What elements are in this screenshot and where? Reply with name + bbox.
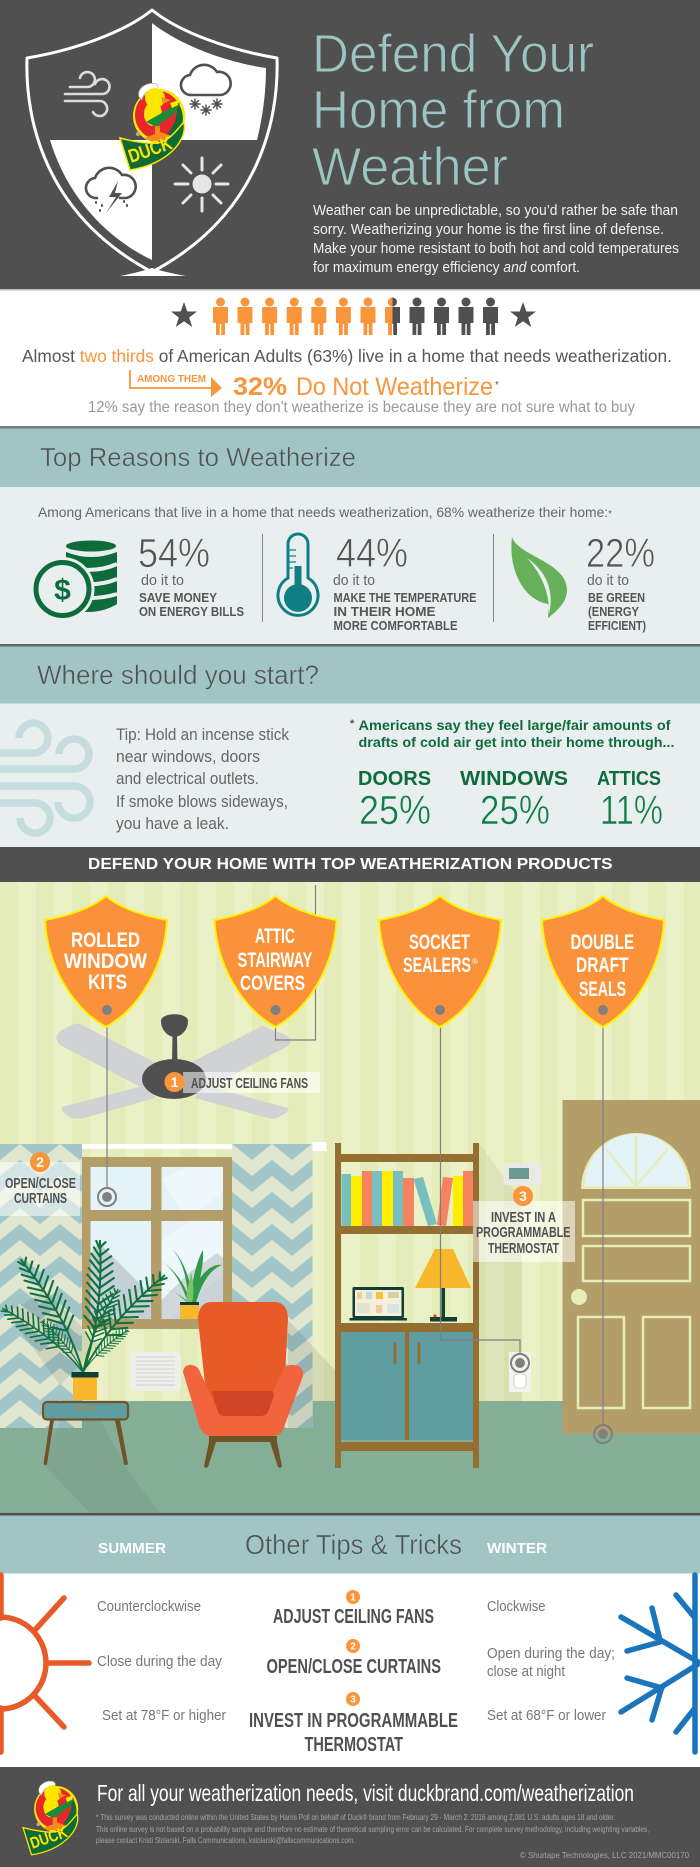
label: open/close curtains: 2 xyxy=(36,1154,44,1170)
stat: 54%: do it to xyxy=(141,573,184,589)
tip text: and electrical outlets. xyxy=(116,769,259,788)
winter tips: close at night xyxy=(487,1663,566,1680)
laptop xyxy=(350,1287,407,1320)
stat: doors: DOORS xyxy=(358,768,431,790)
label: programmable thermostat xyxy=(473,1186,575,1262)
title: Weather xyxy=(312,137,508,197)
ceiling fan xyxy=(56,1014,291,1119)
tip text: If smoke blows sideways, xyxy=(116,792,288,811)
icon: wind xyxy=(65,72,110,116)
stat: 54%: 54% xyxy=(138,530,210,576)
label: summer: SUMMER xyxy=(98,1540,166,1557)
wall shadows xyxy=(288,1320,335,1428)
tip 3 xyxy=(249,1692,458,1756)
icon: leaf xyxy=(511,537,567,618)
drafts statement: drafts of cold air get into their home through... xyxy=(358,735,674,750)
badge: attic stairway covers: COVERS xyxy=(240,972,305,995)
logo: Duck brand: DUCK xyxy=(126,133,175,168)
plant and side table xyxy=(0,1239,171,1513)
badge: socket sealers: SEALERS xyxy=(403,954,471,977)
stat: 22% xyxy=(586,530,655,633)
summer tips: Set at 78°F or higher xyxy=(102,1707,226,1724)
curtain rod xyxy=(82,1142,326,1151)
icon: wind large xyxy=(0,723,90,833)
badge: attic stairway covers: STAIRWAY xyxy=(238,949,312,972)
tip 1 xyxy=(273,1590,434,1628)
icon: coins: $ xyxy=(54,574,71,607)
summer tips: Close during the day xyxy=(97,1653,222,1670)
winter tips: Open during the day; xyxy=(487,1645,615,1662)
curtain right xyxy=(232,1144,312,1428)
label: programmable thermostat: INVEST IN A xyxy=(491,1209,556,1226)
note: 12%: 12% say the reason they don't weatherize is because they are not sure what to buy xyxy=(88,399,635,416)
stat: attics: ATTICS xyxy=(597,768,661,790)
stat: windows: 25% xyxy=(480,787,550,833)
icon: thermometer xyxy=(278,534,318,615)
label: open/close curtains xyxy=(0,1152,80,1216)
panel: statistics xyxy=(0,289,700,428)
callout: 32% do not weatherize: Do Not Weatherize xyxy=(296,373,493,401)
title: Home from xyxy=(312,80,565,140)
title xyxy=(312,24,594,197)
drafts statement: * xyxy=(350,718,355,730)
stat: 54%: SAVE MONEY xyxy=(139,591,218,605)
panel: top reasons xyxy=(0,428,700,646)
intro text: sorry. Weatherizing your home is the first line of defense. xyxy=(313,221,664,238)
callout: 32% do not weatherize: 32% xyxy=(233,373,287,401)
tip text: near windows, doors xyxy=(116,747,260,766)
footnote: please contact Kristi Stolarski, Falls Communications, kstolarski@fallscommunications.com. xyxy=(96,1835,355,1845)
outlet xyxy=(509,1352,531,1392)
stat: attics xyxy=(597,768,663,833)
badge: attic stairway covers: ATTIC xyxy=(255,925,295,948)
icon: star left xyxy=(171,302,197,327)
stat: 22%: EFFICIENT) xyxy=(588,619,646,633)
tip text: you have a leak. xyxy=(116,814,229,833)
badge: double draft seals: SEALS xyxy=(579,978,626,1001)
books xyxy=(342,1171,473,1226)
tip 2: 2 xyxy=(350,1642,356,1652)
label: programmable thermostat: PROGRAMMABLE xyxy=(476,1224,570,1241)
stat: doors: 25% xyxy=(359,787,431,833)
subheading: Among Americans that live in a home that needs weatherization, 68% weatherize their home:* xyxy=(38,504,612,520)
arrow: among them xyxy=(130,370,222,397)
stat: windows: WINDOWS xyxy=(460,768,568,790)
plant shadow xyxy=(7,1290,100,1385)
heading: Other Tips & Tricks xyxy=(245,1529,462,1560)
stat: 54% xyxy=(138,530,244,619)
label: adjust ceiling fans: 1 xyxy=(171,1074,179,1090)
badge: attic stairway covers xyxy=(214,896,336,1027)
tip 1: ADJUST CEILING FANS xyxy=(273,1606,434,1628)
label: programmable thermostat: THERMOSTAT xyxy=(488,1240,559,1257)
stat: 22%: (ENERGY xyxy=(588,605,640,619)
badge: double draft seals: DRAFT xyxy=(576,954,629,977)
badge: rolled window kits: WINDOW xyxy=(64,950,147,973)
label: programmable thermostat: 3 xyxy=(519,1188,527,1204)
icon: storm cloud xyxy=(86,168,136,213)
illustration: room xyxy=(0,882,700,1516)
footnote xyxy=(96,1812,649,1845)
stat: 54%: ON ENERGY BILLS xyxy=(139,605,244,619)
curtain left xyxy=(0,1144,82,1428)
summer tips: Counterclockwise xyxy=(97,1598,201,1615)
winter tips: Clockwise xyxy=(487,1598,546,1615)
intro text: Weather can be unpredictable, so you’d rather be safe than xyxy=(313,202,678,219)
stat: doors xyxy=(358,768,431,833)
icon: snowflake xyxy=(621,1575,700,1752)
heading: Top Reasons to Weatherize xyxy=(40,442,356,472)
people pictogram xyxy=(213,298,498,335)
tip 1: 1 xyxy=(350,1592,356,1604)
icon: coins xyxy=(30,540,117,621)
marker: door xyxy=(594,1425,612,1443)
bookshelf xyxy=(335,1143,522,1468)
banner: top weatherization products xyxy=(0,847,700,882)
panel: other tips and tricks xyxy=(0,1516,700,1767)
banner: top weatherization products: DEFEND YOUR HOME WITH TOP WEATHERIZATION PRODUCTS xyxy=(88,856,613,873)
heading: Where should you start? xyxy=(37,660,319,690)
tip 3: THERMOSTAT xyxy=(304,1734,403,1756)
badge: double draft seals xyxy=(542,896,664,1027)
stat: 44%: MORE COMFORTABLE xyxy=(334,619,458,633)
stat: attics: 11% xyxy=(600,787,663,833)
stat: 44%: 44% xyxy=(336,530,408,576)
shield emblem xyxy=(27,10,277,276)
statistic sentence: Almost two thirds of American Adults (63%) live in a home that needs weatherization. xyxy=(22,346,672,366)
badge: rolled window kits xyxy=(45,896,167,1027)
logo: Duck brand: DUCK xyxy=(28,1823,70,1853)
label: open/close curtains: OPEN/CLOSE xyxy=(5,1175,76,1192)
tip text xyxy=(116,725,289,833)
icon: star right xyxy=(510,302,536,327)
logo: Duck brand xyxy=(23,1781,78,1855)
badge: double draft seals: DOUBLE xyxy=(570,931,634,954)
drafts statement xyxy=(350,718,674,750)
tip 3: 3 xyxy=(350,1694,356,1706)
marker: window xyxy=(98,1188,116,1206)
stat: 44%: MAKE THE TEMPERATURE xyxy=(334,591,476,605)
badge: socket sealers xyxy=(379,896,501,1027)
radiator xyxy=(130,1352,181,1391)
label: adjust ceiling fans: ADJUST CEILING FANS xyxy=(191,1075,308,1092)
logo: Duck brand xyxy=(120,83,185,170)
callout: 32% do not weatherize: * xyxy=(495,380,499,391)
winter tips xyxy=(487,1598,615,1724)
icon: snow cloud xyxy=(181,65,231,115)
icon: sun half xyxy=(0,1575,89,1752)
connector lines xyxy=(107,885,603,1424)
panel: header xyxy=(0,0,700,289)
stat: 44%: do it to xyxy=(333,573,375,589)
intro text: for maximum energy efficiency and comfort. xyxy=(313,259,580,276)
tip 2 xyxy=(266,1639,441,1678)
door xyxy=(562,1100,700,1434)
tip 2: OPEN/CLOSE CURTAINS xyxy=(266,1656,441,1678)
lamp xyxy=(415,1249,471,1322)
badge: socket sealers: ® xyxy=(472,957,478,966)
armchair xyxy=(183,1302,303,1468)
intro text xyxy=(313,202,679,276)
icon: sun xyxy=(175,158,228,211)
badge: rolled window kits: KITS xyxy=(88,971,127,994)
tip 3: INVEST IN PROGRAMMABLE xyxy=(249,1710,458,1732)
thermostat xyxy=(504,1163,542,1185)
marker: socket xyxy=(511,1354,529,1372)
stat: windows xyxy=(460,768,568,833)
stat: 22%: BE GREEN xyxy=(588,591,645,605)
label: adjust ceiling fans xyxy=(164,1072,320,1093)
window xyxy=(82,1157,232,1329)
label: open/close curtains: CURTAINS xyxy=(14,1190,67,1207)
panel: footer xyxy=(0,1767,700,1867)
small plant xyxy=(160,1250,222,1319)
label: winter: WINTER xyxy=(487,1540,547,1557)
stat: 22%: 22% xyxy=(586,530,655,576)
stat: 44% xyxy=(333,530,476,633)
badge: rolled window kits: ROLLED xyxy=(71,929,140,952)
drafts statement: Americans say they feel large/fair amounts of xyxy=(358,718,671,733)
panel: where should you start xyxy=(0,646,700,847)
arrow: among them: AMONG THEM xyxy=(137,374,206,385)
winter tips: Set at 68°F or lower xyxy=(487,1707,606,1724)
stat: 22%: do it to xyxy=(587,573,629,589)
stat: 44%: IN THEIR HOME xyxy=(334,605,436,619)
badge: socket sealers: SOCKET xyxy=(409,931,470,954)
summer tips xyxy=(97,1598,226,1724)
title: Defend Your xyxy=(312,24,594,84)
copyright: © Shurtape Technologies, LLC 2021/MMC00170 xyxy=(520,1850,689,1860)
tip text: Tip: Hold an incense stick xyxy=(116,725,289,744)
